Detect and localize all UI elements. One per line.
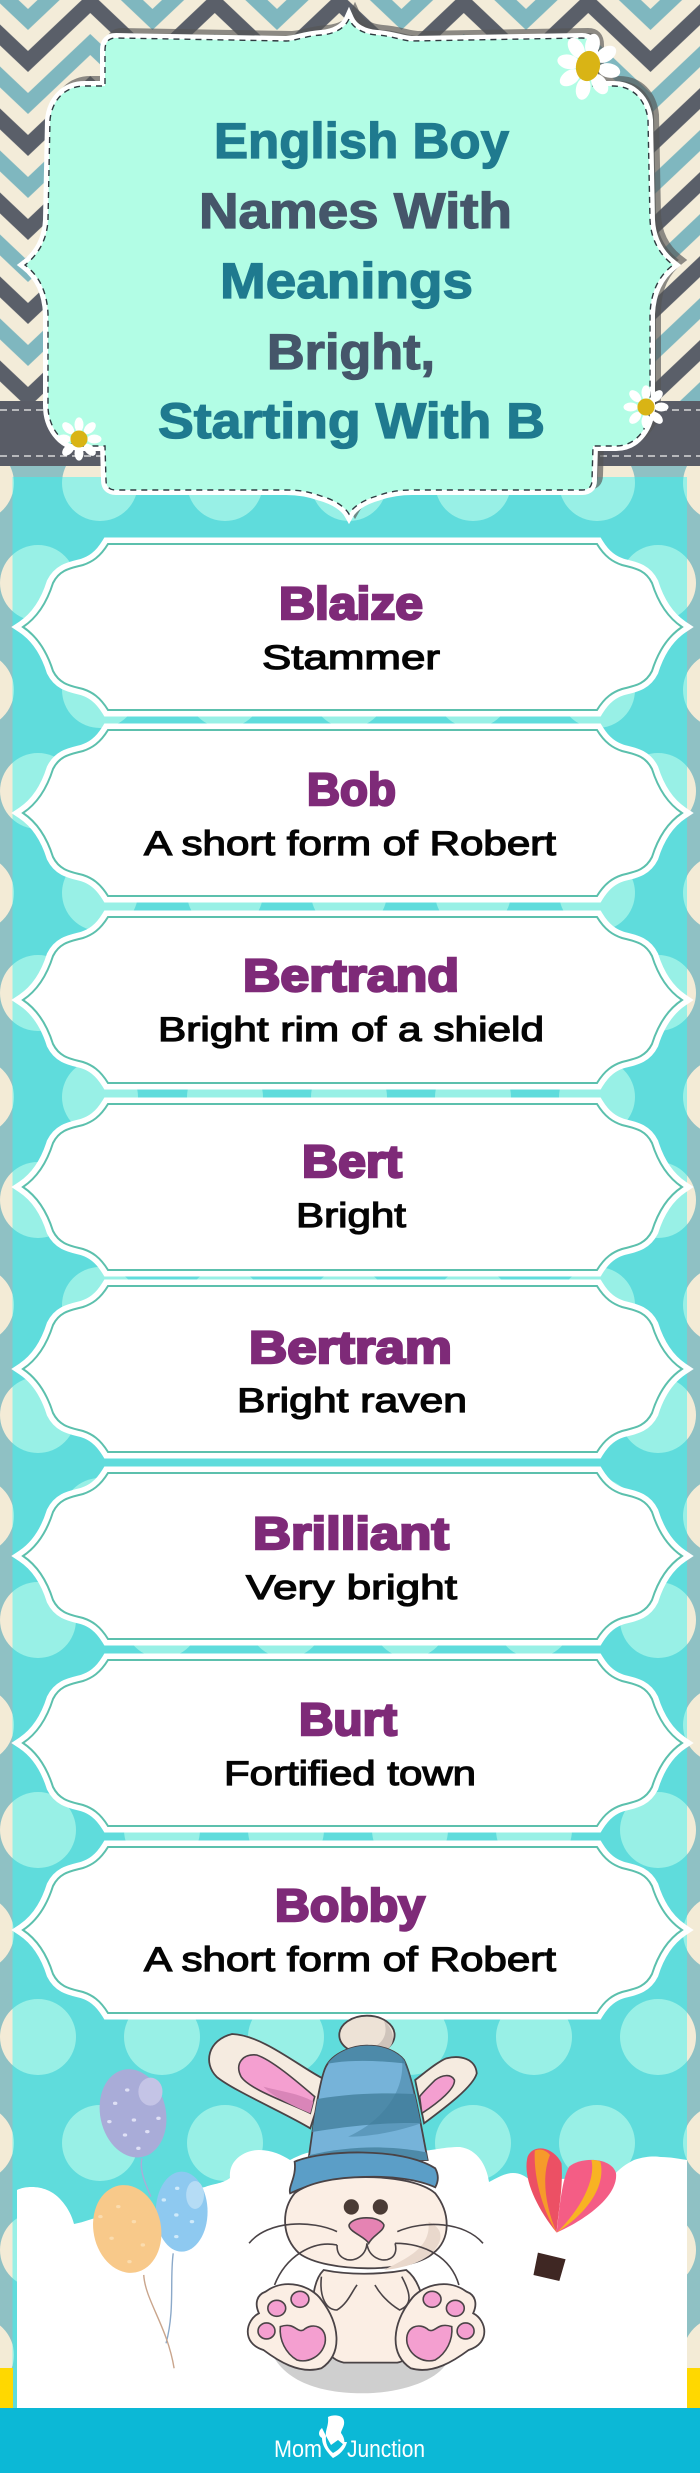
icon: daisy bottom left — [56, 417, 102, 461]
card: Brilliant — [23, 1473, 682, 1639]
card: Blaize: Blaize — [279, 578, 423, 629]
card: Bertrand — [23, 917, 682, 1083]
illustration: heart hot air balloon — [526, 2148, 616, 2281]
illustration: bunny with striped hat — [209, 2016, 484, 2393]
card: Burt: Fortified town — [224, 1755, 476, 1793]
logo: MomJunction: Mom — [274, 2436, 322, 2463]
card: Bertram: Bertram — [249, 1322, 452, 1373]
card: Blaize — [23, 544, 682, 710]
card: Burt — [23, 1660, 682, 1826]
icon: daisy bottom right — [624, 385, 668, 429]
title: English Boy — [214, 113, 509, 169]
illustration: balloons — [88, 2067, 208, 2368]
title: Names With — [199, 183, 512, 239]
card: Bob: A short form of Robert — [144, 825, 557, 863]
card: Brilliant: Brilliant — [253, 1508, 449, 1559]
card: Burt: Burt — [299, 1694, 397, 1745]
yellow edge blocks — [0, 2368, 700, 2408]
card: Bobby: A short form of Robert — [144, 1941, 557, 1979]
card: Bertram: Bright raven — [237, 1382, 467, 1420]
logo: MomJunction: Junction — [347, 2436, 425, 2463]
card: Bobby — [23, 1847, 682, 2013]
panel: title frame — [25, 14, 679, 514]
card: Bob: Bob — [307, 764, 396, 815]
card: Bert: Bright — [296, 1197, 407, 1235]
logo icon: mother and child — [319, 2415, 347, 2458]
dark ribbon band — [0, 401, 700, 466]
card: Bertrand: Bright rim of a shield — [158, 1011, 544, 1049]
background: polka dot panel — [0, 445, 700, 2410]
card: Bobby: Bobby — [275, 1880, 425, 1931]
white cloud — [17, 2147, 687, 2408]
title: Starting With B — [158, 393, 545, 449]
card: Bert: Bert — [302, 1136, 402, 1187]
icon: daisy top right — [550, 27, 627, 106]
card: Bert — [23, 1104, 682, 1270]
background: chevron pattern — [0, 0, 700, 402]
card: Bertrand: Bertrand — [243, 950, 459, 1001]
card: Brilliant: Very bright — [246, 1569, 458, 1607]
title: Bright, — [267, 324, 435, 380]
card: Bob — [23, 730, 682, 896]
title: Meanings — [220, 253, 473, 309]
title — [158, 113, 545, 449]
card: Bertram — [23, 1286, 682, 1452]
footer bar — [0, 2408, 700, 2473]
logo: MomJunction — [274, 2415, 425, 2463]
card: Blaize: Stammer — [262, 639, 440, 677]
